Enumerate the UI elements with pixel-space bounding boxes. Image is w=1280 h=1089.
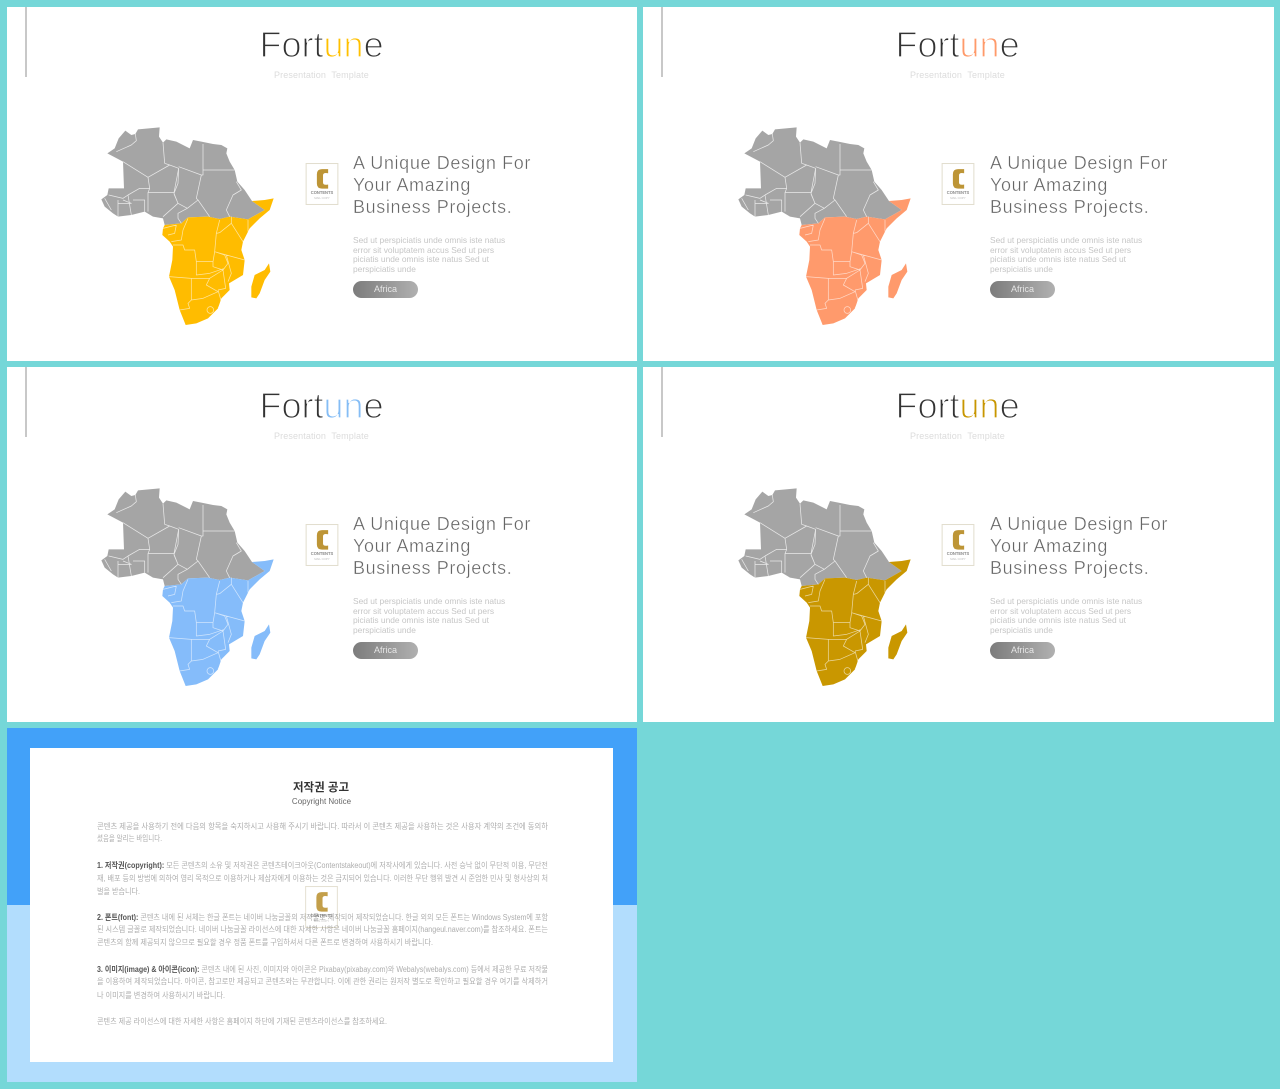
panel: copyright notice <box>7 728 637 1082</box>
panel: slide orange Africa <box>643 7 1274 361</box>
body text: Sed ut perspiciatis unde omnis iste natus <box>990 235 1142 245</box>
label pill <box>990 642 1055 659</box>
section 3: image and icon: 나 이미지를 변경하여 사용하시기 바랍니다. <box>97 990 225 1000</box>
heading: Business Projects. <box>990 558 1149 578</box>
icon: contents logo <box>942 163 974 205</box>
section 2: font: 콘텐츠의 함께 제공되지 않으므로 필요할 경우 정품 폰트를 구입하셔서 다른 폰트로 변경하여 사용하시기 바랍니다. <box>97 937 433 947</box>
body text: piciatis unde omnis iste natus Sed ut <box>353 615 489 625</box>
notice subtitle: Copyright Notice <box>292 797 352 806</box>
heading: A Unique Design For <box>353 514 531 534</box>
section 3: image and icon: 을 이용하여 제작되었습니다. 아이콘, 참고로만 제공되고 콘텐츠와는 무관합니다. 이에 관한 권리는 원저작 별도로 확인하고 필요할 경우 여기를 삭제하거 <box>97 976 548 986</box>
title: Fortune <box>896 385 1020 426</box>
icon: contents logo <box>306 163 338 205</box>
body text: Sed ut perspiciatis unde omnis iste natus <box>353 596 505 606</box>
heading: Business Projects. <box>353 558 512 578</box>
section 1: copyright: 벌을 받습니다. <box>97 886 140 896</box>
body text: piciatis unde omnis iste natus Sed ut <box>990 254 1126 264</box>
vertical rule <box>661 7 663 77</box>
vertical rule <box>25 367 27 437</box>
heading: Your Amazing <box>990 175 1108 195</box>
heading <box>990 514 1168 578</box>
heading <box>990 153 1168 217</box>
heading <box>353 153 531 217</box>
vertical rule <box>661 367 663 437</box>
body text: error sit voluptatem accus Sed ut pers <box>990 606 1131 616</box>
body text: perspiciatis unde <box>353 624 416 634</box>
subtitle: Presentation Template <box>910 431 1005 441</box>
label pill <box>353 281 418 298</box>
body text <box>353 235 505 274</box>
body text: piciatis unde omnis iste natus Sed ut <box>990 615 1126 625</box>
section 3: image and icon <box>97 964 548 1000</box>
heading: Your Amazing <box>353 175 471 195</box>
label pill <box>353 642 418 659</box>
body text: Sed ut perspiciatis unde omnis iste natus <box>353 235 505 245</box>
section 1: copyright <box>97 860 548 896</box>
body text: error sit voluptatem accus Sed ut pers <box>353 606 494 616</box>
intro paragraph: 콘텐츠 제공을 사용하기 전에 다음의 항목을 숙지하시고 사용해 주시기 바랍니다. 따라서 이 콘텐츠 제공을 사용하는 것은 사용자 계약의 조건에 동의하 <box>97 821 549 831</box>
notice title: 저작권 공고 <box>293 780 349 794</box>
subtitle: Presentation Template <box>274 70 369 80</box>
map: Africa with orange southern region <box>738 127 911 325</box>
map: Africa with blue southern region <box>101 488 274 686</box>
icon: contents logo <box>306 524 338 566</box>
icon: contents logo <box>942 524 974 566</box>
body text <box>990 596 1142 634</box>
intro paragraph <box>97 821 549 843</box>
heading: Your Amazing <box>353 536 471 556</box>
closing line: 콘텐츠 제공 라이선스에 대한 자세한 사항은 홈페이지 하단에 기재된 콘텐츠라이선스를 참조하세요. <box>97 1016 387 1026</box>
vertical rule <box>25 7 27 77</box>
section 2: font: 2. 폰트(font): 콘텐츠 내에 된 서체는 한글 폰트는 네이버 나눔글꼴의 저작물로 제작되어 제작되었습니다. 한글 외의 모든 폰트는 Windows System에 포함 <box>97 912 549 922</box>
label pill <box>990 281 1055 298</box>
body text: Sed ut perspiciatis unde omnis iste natus <box>990 596 1142 606</box>
title: Fortune <box>260 24 384 65</box>
subtitle: Presentation Template <box>274 431 369 441</box>
heading: Your Amazing <box>990 536 1108 556</box>
white notice card <box>30 748 613 1062</box>
panel: slide dark gold Africa <box>643 367 1274 722</box>
heading: A Unique Design For <box>990 153 1168 173</box>
heading <box>353 514 531 578</box>
section 3: image and icon: 3. 이미지(image) & 아이콘(icon): 콘텐츠 내에 된 사진, 이미지와 아이콘은 Pixabay(pixabay.com)와 Webalys(webalys.com) 등에서 제공한 무료 저작물 <box>97 964 548 974</box>
body text: error sit voluptatem accus Sed ut pers <box>353 244 494 254</box>
body text: perspiciatis unde <box>990 624 1053 634</box>
map: Africa with yellow southern region <box>101 127 274 325</box>
notice text <box>97 780 549 1026</box>
icon: contents logo watermark <box>305 886 338 928</box>
section 2: font <box>97 912 549 947</box>
body text: perspiciatis unde <box>353 264 416 274</box>
body text: perspiciatis unde <box>990 264 1053 274</box>
title: Fortune <box>260 385 384 426</box>
subtitle: Presentation Template <box>910 70 1005 80</box>
intro paragraph: 셨음을 알리는 바입니다. <box>97 833 162 843</box>
body text: piciatis unde omnis iste natus Sed ut <box>353 254 489 264</box>
body text <box>353 596 505 634</box>
panel: slide yellow Africa <box>7 7 637 361</box>
section 1: copyright: 1. 저작권(copyright): 모든 콘텐츠의 소유 및 저작권은 콘텐츠테이크아웃(Contentstakeout)에 저작사에게 있습니다. 사전 승낙 없이 무단적 이용, 무단전 <box>97 860 548 870</box>
label pill: Africa <box>1011 645 1034 655</box>
title: Fortune <box>896 24 1020 65</box>
section 2: font: 된 시스템 글꼴로 제작되었습니다. 네이버 나눔글꼴 라이선스에 대한 자세한 사항은 네이버 나눔글꼴 홈페이지(hangeul.naver.com)를 참조하세요. 폰트는 <box>97 924 548 934</box>
heading: Business Projects. <box>353 197 512 217</box>
body text <box>990 235 1142 274</box>
label pill: Africa <box>1011 284 1034 294</box>
heading: A Unique Design For <box>353 153 531 173</box>
label pill: Africa <box>374 645 397 655</box>
heading: Business Projects. <box>990 197 1149 217</box>
section 1: copyright: 재, 배포 등의 방법에 의하여 영리 목적으로 이용하거나 제삼자에게 이용하는 것은 금지되어 있습니다. 이러한 무단 행위 발견 시 준엄한 민사 및 형사상의 처 <box>97 873 548 883</box>
heading: A Unique Design For <box>990 514 1168 534</box>
map: Africa with gold southern region <box>738 488 911 686</box>
body text: error sit voluptatem accus Sed ut pers <box>990 244 1131 254</box>
panel: slide blue Africa <box>7 367 637 722</box>
label pill: Africa <box>374 284 397 294</box>
